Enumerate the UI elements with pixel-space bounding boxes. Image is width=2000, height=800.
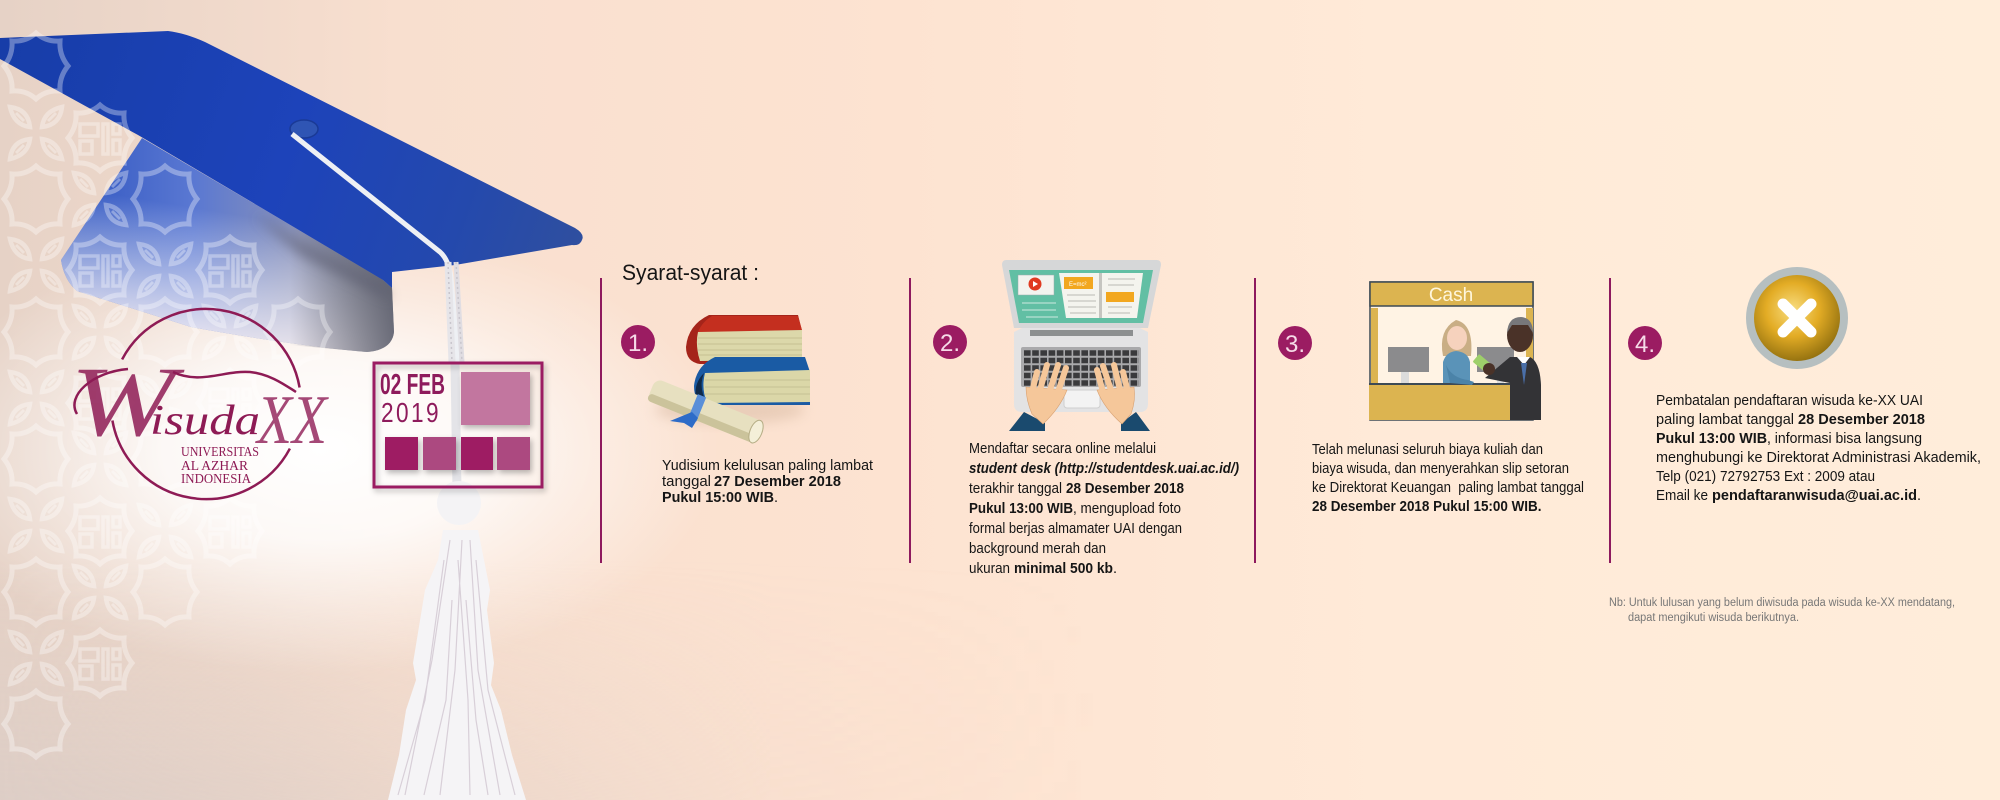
text: requirement 2: Mendaftar secara online melalui xyxy=(969,441,1156,457)
cap top board xyxy=(0,31,583,288)
footnote xyxy=(1609,597,1955,624)
icon: laptop with typing hands: E=mc² xyxy=(1069,282,1087,288)
logo university name xyxy=(181,445,259,487)
panel: step 3 xyxy=(1278,282,1584,515)
cap cord xyxy=(292,134,462,362)
text: requirement 1: tanggal xyxy=(662,474,711,490)
text: requirement 2: student desk (http://studentdesk.uai.ac.id/) xyxy=(969,461,1239,477)
text: requirement 2: formal berjas almamater UAI dengan xyxy=(969,521,1182,537)
text: requirement 3: 28 Desember 2018 Pukul 15:00 WIB. xyxy=(1312,499,1542,515)
date text: 2019 xyxy=(381,397,441,428)
text: requirement 1: . xyxy=(774,490,778,506)
column divider 1 xyxy=(600,278,602,563)
text: requirement 2: minimal 500 kb xyxy=(1014,561,1113,577)
text: requirement 2: ukuran xyxy=(969,561,1010,577)
text: requirement 4: Pukul 13:00 WIB xyxy=(1656,431,1767,447)
logo script title: XX xyxy=(255,382,330,459)
text: requirement 3: biaya wisuda, dan menyerahkan slip setoran xyxy=(1312,461,1569,477)
text: requirement 2: terakhir tanggal xyxy=(969,481,1062,497)
logo university name: UNIVERSITAS xyxy=(181,445,259,460)
logo script title: W xyxy=(70,346,185,457)
text: requirement 2: , mengupload foto xyxy=(1073,501,1181,517)
right hand xyxy=(1097,365,1150,431)
text: requirement 4: , informasi bisa langsung xyxy=(1767,431,1922,447)
text: requirement 1: Pukul 15:00 WIB xyxy=(662,490,774,506)
text: requirement 4: . xyxy=(1917,488,1921,504)
number badge 3 xyxy=(1278,326,1312,360)
text: requirement 4: Email ke xyxy=(1656,488,1708,504)
pattern: decorative islamic lattice xyxy=(4,33,330,757)
number badge 2: 2. xyxy=(940,330,960,357)
cap button xyxy=(290,120,318,138)
logo: Wisuda XX Universitas Al Azhar Indonesia xyxy=(70,309,330,499)
teller xyxy=(1442,320,1474,385)
icon: tassel xyxy=(388,362,526,800)
footnote: Nb: Untuk lulusan yang belum diwisuda pada wisuda ke-XX mendatang, xyxy=(1609,597,1955,609)
column divider 2 xyxy=(909,278,911,563)
text: requirement 3: ke Direktorat Keuangan paling lambat tanggal xyxy=(1312,480,1584,496)
text: requirement 2: 28 Desember 2018 xyxy=(1066,481,1184,497)
logo university name: AL AZHAR xyxy=(181,459,249,474)
calendar date box xyxy=(374,363,542,487)
panel: step 2 xyxy=(933,260,1239,577)
number badge 1 xyxy=(621,325,655,359)
text: requirement 4: 28 Desember 2018 xyxy=(1798,412,1925,428)
number badge 1: 1. xyxy=(628,330,648,357)
icon: laptop with typing hands xyxy=(1002,260,1161,431)
text: requirement 4: Pembatalan pendaftaran wisuda ke-XX UAI xyxy=(1656,393,1923,409)
text: requirement 4: Telp (021) 72792753 Ext : 2009 atau xyxy=(1656,469,1875,485)
text: requirement 2 xyxy=(969,441,1239,577)
logo script title: isuda xyxy=(150,398,260,444)
date text xyxy=(380,369,445,428)
number badge 3: 3. xyxy=(1285,331,1305,358)
text: requirement 2: . xyxy=(1113,561,1117,577)
column divider 4 xyxy=(1609,278,1611,563)
icon: mortarboard cap xyxy=(0,31,583,362)
text: requirement 4: paling lambat tanggal xyxy=(1656,412,1794,428)
column divider 3 xyxy=(1254,278,1256,563)
date text: 02 FEB xyxy=(380,369,445,401)
icon: cashier booth: Cash xyxy=(1429,285,1473,306)
text: requirement 4: menghubungi ke Direktorat Administrasi Akademik, xyxy=(1656,450,1981,466)
customer xyxy=(1473,317,1541,420)
text: requirement 4: pendaftaranwisuda@uai.ac.id xyxy=(1712,488,1917,504)
logo script title xyxy=(70,346,330,459)
text: requirement 2: Pukul 13:00 WIB xyxy=(969,501,1073,517)
icon: books and diploma xyxy=(646,315,810,446)
background gradient xyxy=(0,0,1040,800)
number badge 2 xyxy=(933,325,967,359)
icon: cashier booth xyxy=(1369,282,1541,420)
footnote: dapat mengikuti wisuda berikutnya. xyxy=(1628,612,1799,624)
logo ring xyxy=(112,309,300,499)
text: requirement 3: Telah melunasi seluruh biaya kuliah dan xyxy=(1312,442,1543,458)
text: requirement 1: 27 Desember 2018 xyxy=(714,474,841,490)
text: requirement 3 xyxy=(1312,442,1584,515)
text: requirement 2: background merah dan xyxy=(969,541,1106,557)
icon: gold cancel button xyxy=(1746,267,1848,369)
cap skull xyxy=(61,138,394,352)
calendar squares xyxy=(385,372,530,470)
heading: Syarat-syarat: Syarat-syarat : xyxy=(622,260,759,285)
left hand xyxy=(1009,365,1067,431)
text: requirement 4 xyxy=(1656,393,1981,504)
number badge 4 xyxy=(1628,326,1662,360)
text: requirement 1 xyxy=(662,458,873,506)
logo university name: INDONESIA xyxy=(181,472,252,487)
number badge 4: 4. xyxy=(1635,331,1655,358)
panel: step 4 xyxy=(1609,267,1981,624)
panel: step 1 xyxy=(621,315,873,506)
text: requirement 1: Yudisium kelulusan paling lambat xyxy=(662,458,873,474)
